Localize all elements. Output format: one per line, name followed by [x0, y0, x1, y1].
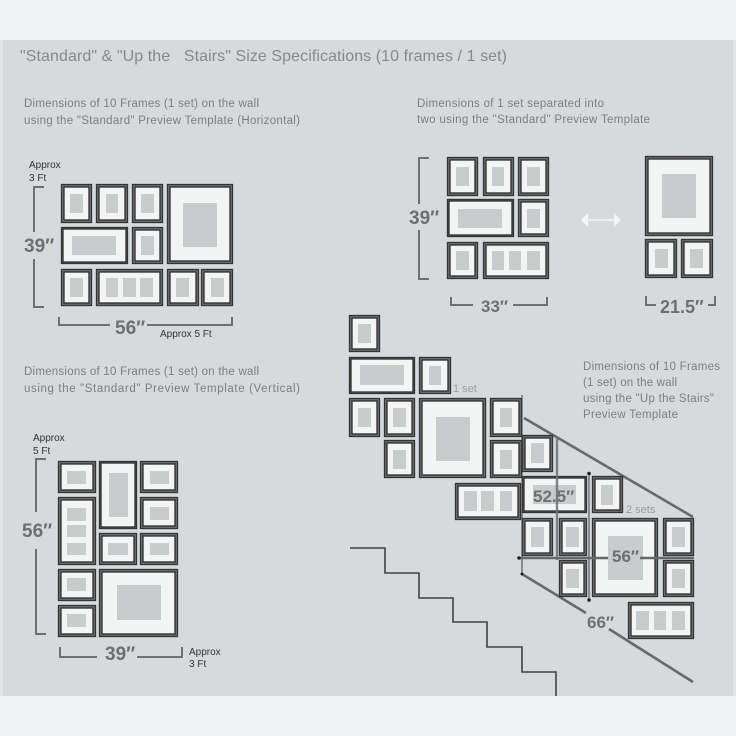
- panel: stairs first set: [350, 316, 522, 520]
- label: approx 3 ft vertical: [189, 647, 221, 670]
- dimension: 21.5 inch: 21.5″: [660, 297, 704, 317]
- dimension: 66 inch: 66″: [587, 613, 614, 632]
- text block: up the stairs description: Dimensions of 10 Frames: [583, 361, 720, 373]
- measure line: 56 inch horizontal: [517, 556, 694, 560]
- text block: separated set description: two using the "Standard" Preview Template: [417, 114, 650, 126]
- dimension: 39 inch horizontal template: [24, 187, 54, 307]
- label: approx 3 ft: 3 Ft: [29, 173, 46, 184]
- dimension: 39 inch horizontal template: 39″: [24, 236, 54, 257]
- measure line: upper diagonal: [524, 418, 693, 517]
- text block: separated set description: Dimensions of 1 set separated into: [417, 98, 604, 110]
- panel: horizontal template: [62, 184, 232, 306]
- label: approx 5 ft vertical: 5 Ft: [33, 446, 50, 457]
- dimension: 39 inch separated set: 39″: [409, 208, 439, 229]
- measure line: 52.5 inch vertical: [520, 395, 591, 602]
- dimension: 56 inch stairs: 56″: [612, 547, 639, 566]
- text block: vertical template description: Dimensions of 10 Frames (1 set) on the wall: [24, 366, 259, 378]
- dimension: 39 inch vertical template: [60, 644, 182, 665]
- measure line: lower diagonal: [522, 574, 693, 682]
- diagram: staircase outline: [350, 548, 556, 696]
- text block: horizontal template description: using the "Standard" Preview Template (Horizontal): [24, 115, 300, 127]
- text block: vertical template description: using the "Standard" Preview Template (Vertical): [24, 383, 300, 395]
- label: 1 set: 1 set: [453, 383, 477, 395]
- dimension: 33 inch: [451, 297, 547, 316]
- text block: horizontal template description: [24, 98, 300, 127]
- text block: separated set description: [417, 98, 650, 126]
- label: approx 3 ft vertical: Approx: [189, 647, 221, 658]
- dimension: 56 inch horizontal template: [59, 317, 232, 339]
- panel: separated set right group: [646, 156, 712, 278]
- text block: up the stairs description: using the "Up the Stairs": [583, 393, 714, 405]
- label: approx 5 ft: Approx 5 Ft: [160, 329, 212, 340]
- dimension: 39 inch separated set: [409, 158, 439, 279]
- label: 2 sets: 2 sets: [626, 504, 656, 516]
- title: "Standard" & "Up the Stairs" Size Specifications (10 frames / 1 set): [20, 48, 507, 65]
- text block: up the stairs description: (1 set) on the wall: [583, 377, 677, 389]
- dimension: 52.5 inch: 52.5″: [533, 487, 574, 506]
- panel: stairs second set: [522, 436, 694, 638]
- label: approx 5 ft vertical: [33, 433, 65, 457]
- dimension: 56 inch vertical template: 56″: [22, 521, 52, 542]
- label: approx 3 ft vertical: 3 Ft: [189, 659, 206, 670]
- panel: separated set left group: [448, 158, 548, 278]
- dimension: 56 inch vertical template: [22, 459, 52, 634]
- text block: horizontal template description: Dimensions of 10 Frames (1 set) on the wall: [24, 98, 259, 110]
- panel: vertical template: [58, 462, 178, 636]
- dimension: 21.5 inch: [646, 296, 715, 317]
- label: approx 3 ft: [29, 160, 61, 184]
- label: approx 3 ft: Approx: [29, 160, 61, 171]
- dimension: 39 inch vertical template: 39″: [105, 644, 135, 665]
- text block: up the stairs description: [583, 361, 720, 421]
- text block: up the stairs description: Preview Template: [583, 409, 678, 421]
- text block: vertical template description: [24, 366, 300, 395]
- label: approx 5 ft vertical: Approx: [33, 433, 65, 444]
- dimension: 33 inch: 33″: [481, 297, 508, 316]
- dimension: 56 inch horizontal template: 56″: [115, 318, 145, 339]
- arrow: separate groups: [581, 213, 621, 227]
